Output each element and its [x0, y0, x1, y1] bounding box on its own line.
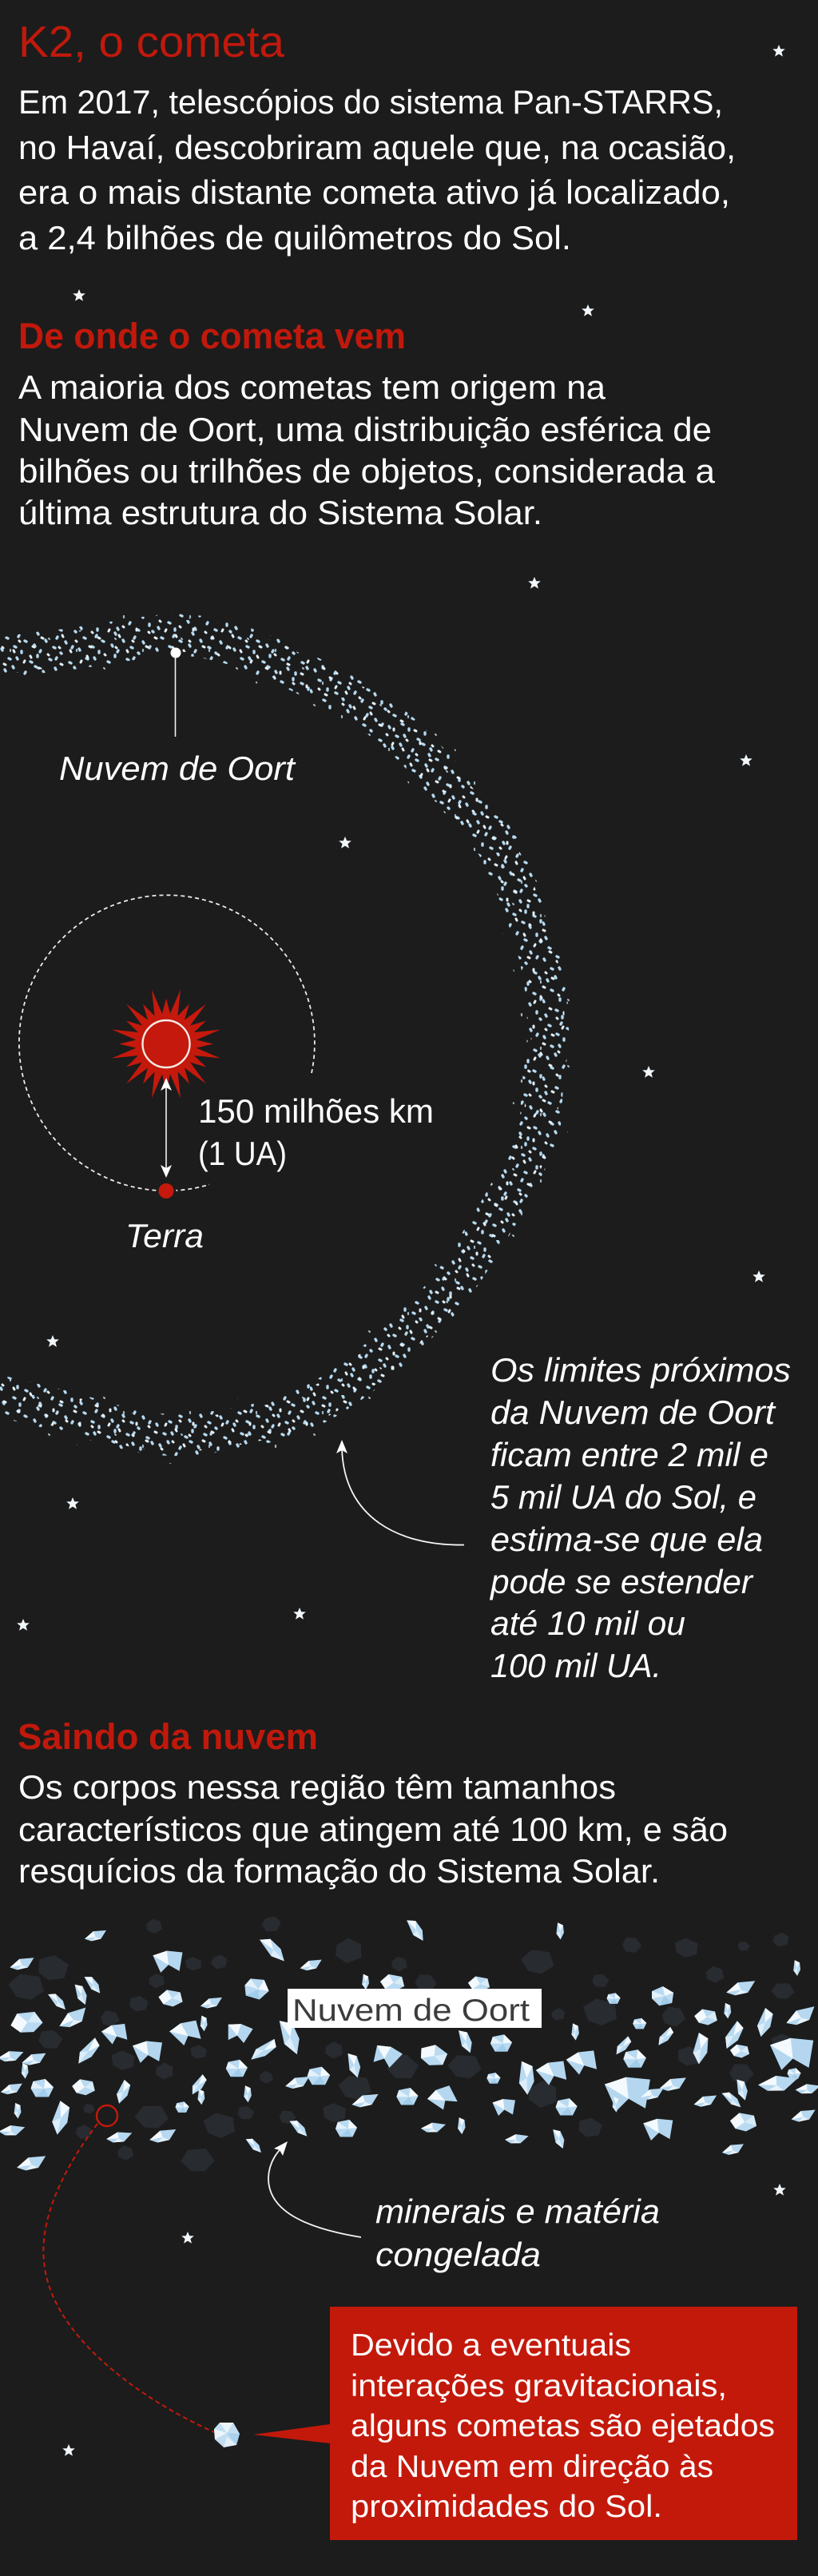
callout: limits: [489, 1351, 791, 1684]
paragraph: origem: bilhões ou trilhões de objetos, considerada a: [18, 452, 716, 490]
bright ice fragments: [0, 1918, 818, 2170]
icon: Earth: [157, 1183, 175, 1200]
heading: Saindo da nuvem: Saindo da nuvem: [18, 1716, 318, 1757]
icon: sun: [112, 989, 220, 1098]
callout: limits: 100 mil UA.: [490, 1647, 661, 1684]
double arrow: sun to Earth: [161, 1078, 172, 1178]
intro paragraph: no Havaí, descobriram aquele que, na ocasião,: [18, 129, 736, 166]
pointer: Nuvem de Oort: [171, 647, 181, 737]
label: Nuvem de Oort: Nuvem de Oort: [59, 749, 296, 787]
icon: comet: [214, 2423, 240, 2447]
fragment field: [0, 1916, 818, 2177]
callout: ejected comets: alguns cometas são ejetados: [351, 2409, 775, 2443]
callout: limits: da Nuvem de Oort: [490, 1393, 776, 1431]
dim background fragments: [6, 1916, 796, 2177]
heading: De onde o cometa vem: De onde o cometa vem: [18, 316, 406, 356]
label: distance: [198, 1092, 434, 1172]
callout: ejected comets: interações gravitacionais,: [351, 2369, 727, 2403]
label: minerais e matéria congelada: minerais e matéria: [375, 2192, 660, 2230]
arrow: minerais: [268, 2141, 361, 2237]
intro paragraph: era o mais distante cometa ativo já localizado,: [18, 173, 730, 211]
callout: ejected comets: da Nuvem em direção às: [351, 2450, 713, 2484]
label: distance: 150 milhões km: [198, 1092, 434, 1130]
comet origin circle: [97, 2105, 117, 2126]
callout: ejected comets: Devido a eventuais: [351, 2328, 631, 2363]
paragraph: corpos: resquícios da formação do Sistema Solar.: [18, 1852, 660, 1890]
paragraph: origem: [18, 368, 716, 531]
intro paragraph: a 2,4 bilhões de quilômetros do Sol.: [18, 219, 571, 256]
intro paragraph: Em 2017, telescópios do sistema Pan-STARRS,: [18, 83, 723, 121]
label: minerais e matéria congelada: [375, 2192, 660, 2273]
callout: ejected comets: proximidades do Sol.: [351, 2490, 662, 2524]
paragraph: origem: última estrutura do Sistema Solar.: [18, 494, 542, 531]
Earth orbit: [19, 895, 315, 1191]
paragraph: origem: Nuvem de Oort, uma distribuição esférica de: [18, 411, 712, 448]
callout: limits: até 10 mil ou: [490, 1604, 685, 1642]
comet trajectory: [43, 2124, 214, 2432]
Oort cloud ring: [0, 635, 548, 1435]
label: minerais e matéria congelada: congelada: [375, 2236, 541, 2273]
paragraph: corpos: característicos que atingem até 100 km, e são: [18, 1811, 728, 1848]
label: distance: (1 UA): [198, 1135, 287, 1172]
label: Terra: Terra: [125, 1217, 204, 1254]
callout: limits: pode se estender: [489, 1563, 754, 1600]
intro paragraph: [18, 83, 736, 256]
callout: limits: Os limites próximos: [490, 1351, 791, 1389]
paragraph: corpos: [18, 1768, 728, 1890]
callout: limits: 5 mil UA do Sol, e: [490, 1478, 756, 1516]
callout: limits: ficam entre 2 mil e: [490, 1436, 768, 1473]
callout: limits: estima-se que ela: [490, 1521, 763, 1558]
arrow: limits callout: [336, 1440, 464, 1545]
label box: Nuvem de Oort: Nuvem de Oort: [292, 1994, 530, 2028]
paragraph: corpos: Os corpos nessa região têm tamanhos: [18, 1768, 616, 1806]
callout: ejected comets: [253, 2307, 797, 2540]
title: K2, o cometa: [18, 17, 284, 66]
paragraph: origem: A maioria dos cometas tem origem na: [18, 368, 606, 406]
